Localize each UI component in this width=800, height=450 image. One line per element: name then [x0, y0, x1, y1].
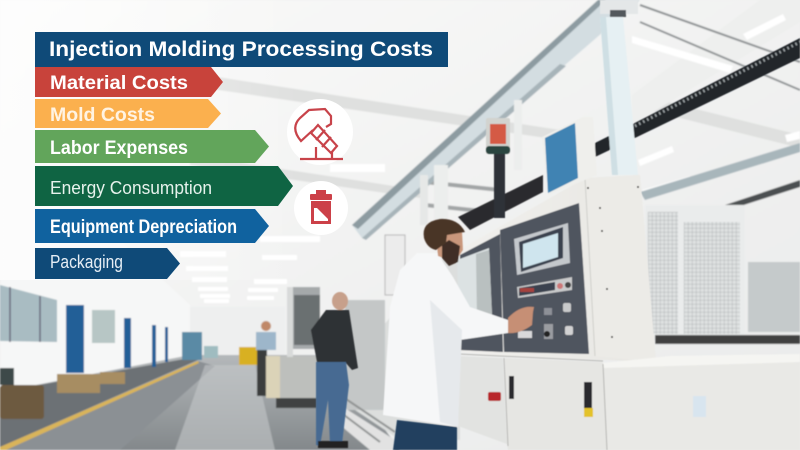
left wall: [0, 130, 190, 393]
icon: mold tool in circle: [287, 99, 353, 165]
title banner: [35, 32, 448, 67]
machine right of second worker: [340, 235, 460, 450]
dark panels: [459, 234, 503, 352]
mid machine: [287, 287, 320, 357]
banner: energy consumption: [35, 166, 293, 206]
blue housing: [542, 117, 597, 195]
banner: equipment depreciation: [35, 209, 269, 243]
lights and right rails: [632, 14, 800, 196]
banner: material costs: [35, 67, 223, 97]
title banner: Injection Molding Processing Costs: [49, 38, 433, 61]
control strip: [517, 277, 572, 298]
worker in dark sweater: [311, 292, 358, 448]
cart: [266, 356, 317, 408]
banner: labor expenses: Labor Expenses: [50, 138, 188, 159]
banner: labor expenses: [35, 130, 269, 163]
banner: mold costs: Mold Costs: [50, 105, 155, 126]
banner: packaging: [35, 248, 180, 279]
icon: container in circle: [294, 181, 348, 235]
cabinet rivets: [587, 186, 639, 338]
lower cabinets: [458, 354, 800, 450]
mesh guard: [645, 205, 800, 340]
ceiling beams: [190, 0, 800, 198]
gantry rail: [352, 0, 640, 240]
touch screen: [514, 223, 570, 275]
far wall: [190, 307, 285, 357]
banner: packaging: Packaging: [50, 252, 123, 272]
blue doors: [66, 305, 84, 373]
banner: energy consumption: Energy Consumption: [50, 178, 212, 198]
windows on wall: [0, 285, 218, 373]
banner: equipment depreciation: Equipment Depreciation: [50, 217, 237, 238]
banner: material costs: Material Costs: [50, 73, 188, 94]
banner: mold costs: [35, 99, 221, 128]
left light wash: [0, 0, 300, 280]
buttons: [544, 308, 552, 315]
signal tower light: [486, 118, 510, 218]
background worker: [256, 321, 276, 396]
operator in white coat: [383, 219, 534, 450]
yellow bins: [239, 347, 258, 365]
ceiling lights: [180, 164, 385, 303]
door window: [457, 248, 492, 322]
pallets and rings: [57, 374, 100, 393]
floor: [0, 355, 400, 450]
column: [600, 17, 638, 175]
operator machine cabinet: [457, 175, 656, 362]
black cable hose: [458, 38, 800, 230]
